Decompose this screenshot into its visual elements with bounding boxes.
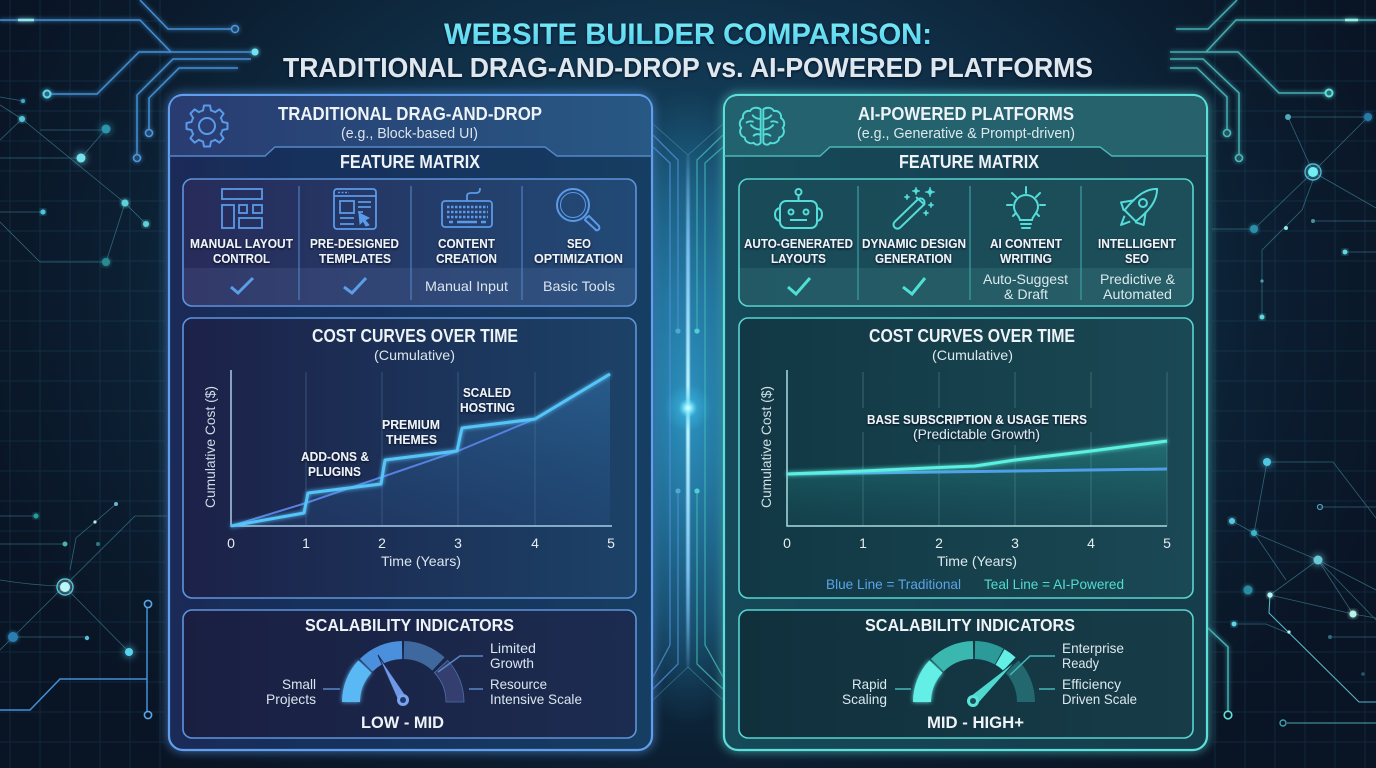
- label: enterprise ready: Enterprise: [1062, 640, 1124, 656]
- annotation: add-ons: [301, 449, 369, 479]
- straight trend line: [231, 419, 535, 526]
- panel subheading: (e.g., Block-based UI): [341, 126, 478, 142]
- panel heading: TRADITIONAL DRAG-AND-DROP: [278, 104, 542, 124]
- y axis label: Cumulative Cost ($): [202, 386, 218, 508]
- chart heading: COST CURVES OVER TIME: [869, 326, 1075, 346]
- axes: [787, 370, 1167, 526]
- feature matrix: [183, 179, 636, 306]
- feature: content creation: CREATION: [436, 251, 497, 266]
- value: predictive and automated: Automated: [1103, 286, 1172, 302]
- panel header band: [725, 96, 1206, 156]
- icon: gear: [186, 106, 228, 146]
- x axis label: Time (Years): [381, 553, 461, 569]
- annotation: base subscription: [867, 412, 1087, 442]
- label: small projects: Small: [282, 676, 316, 692]
- label: small projects: [266, 676, 316, 707]
- feature: intelligent seo: [1098, 236, 1176, 266]
- annotation: base subscription: BASE SUBSCRIPTION & USAGE TIERS: [867, 412, 1087, 427]
- label: limited growth: Limited: [490, 640, 536, 656]
- gauge needle: [969, 660, 1017, 705]
- scalability indicators: [183, 610, 636, 738]
- annotation: add-ons: PLUGINS: [308, 464, 361, 479]
- feature: pre-designed templates: [310, 236, 399, 266]
- ai teal line: [787, 441, 1167, 474]
- icon: keyboard: [442, 188, 492, 227]
- legend: [826, 576, 1124, 592]
- check 1: [788, 278, 810, 294]
- x tick labels: 3: [1011, 535, 1019, 551]
- panel subheading: (e.g., Generative & Prompt-driven): [857, 126, 1075, 142]
- feature matrix heading: FEATURE MATRIX: [340, 152, 480, 172]
- network nodes: right: [1208, 113, 1376, 726]
- value: basic tools: Basic Tools: [543, 278, 615, 294]
- label: resource intensive scale: Intensive Scale: [490, 691, 582, 707]
- feature: content creation: CONTENT: [438, 236, 495, 251]
- cost curve chart: [183, 318, 636, 598]
- cost curve chart: [739, 318, 1193, 598]
- scalability indicators: [739, 610, 1193, 738]
- check 2: [903, 278, 925, 294]
- feature: manual layout control: [190, 236, 293, 266]
- label: resource intensive scale: [490, 676, 582, 707]
- label: rapid scaling: Rapid: [852, 676, 887, 692]
- x tick labels: 5: [1163, 535, 1171, 551]
- x tick labels: 2: [378, 535, 386, 551]
- feature: auto-generated layouts: LAYOUTS: [771, 251, 826, 266]
- value: predictive and automated: Predictive &: [1100, 271, 1176, 287]
- chart subheading: (Cumulative): [374, 347, 455, 363]
- x tick labels: 1: [859, 535, 867, 551]
- icon: magic wand: [892, 187, 935, 230]
- feature: seo optimization: [534, 236, 623, 266]
- y axis label: Cumulative Cost ($): [758, 386, 774, 508]
- x tick labels: 4: [1087, 535, 1095, 551]
- icon: rocket: [1110, 178, 1168, 236]
- panel body: [169, 95, 652, 750]
- feature: dynamic design generation: DYNAMIC DESIGN: [862, 236, 966, 251]
- panel body: [724, 95, 1207, 750]
- label: limited growth: [490, 640, 536, 671]
- feature: seo optimization: SEO: [567, 236, 591, 251]
- icon: magnifier: [557, 189, 599, 230]
- stepped cost line: [231, 374, 610, 526]
- title: [283, 18, 1093, 83]
- annotation: base subscription: (Predictable Growth): [913, 426, 1040, 442]
- annotation: scaled hosting: [460, 385, 515, 415]
- x tick labels: 5: [607, 535, 615, 551]
- gauge value: MID - HIGH+: [927, 713, 1024, 732]
- feature matrix heading: FEATURE MATRIX: [899, 152, 1039, 172]
- feature: auto-generated layouts: [744, 236, 853, 266]
- x axis label: Time (Years): [937, 553, 1017, 569]
- title line 1: WEBSITE BUILDER COMPARISON:: [444, 18, 932, 51]
- label: resource intensive scale: Resource: [490, 676, 547, 692]
- gauge: [342, 641, 464, 706]
- value: auto-suggest and draft: Auto-Suggest: [983, 271, 1068, 287]
- feature: dynamic design generation: [862, 236, 966, 266]
- area under curve: [787, 441, 1167, 526]
- area under curve: [231, 374, 610, 526]
- label: small projects: Projects: [266, 691, 316, 707]
- annotation: scaled hosting: HOSTING: [460, 400, 515, 415]
- x tick labels: [783, 535, 1171, 551]
- check 1: [231, 278, 253, 293]
- x tick labels: 4: [531, 535, 539, 551]
- feature: pre-designed templates: TEMPLATES: [319, 251, 391, 266]
- label: enterprise ready: Ready: [1062, 655, 1099, 671]
- label: rapid scaling: [842, 676, 887, 707]
- x tick labels: 0: [783, 535, 791, 551]
- title line 2: TRADITIONAL DRAG-AND-DROP vs. AI-POWERED PLATFORMS: [283, 52, 1093, 83]
- circuit traces: top right: [1170, 0, 1376, 162]
- legend: Blue Line = Traditional: [826, 576, 961, 592]
- gauge: [913, 641, 1035, 707]
- panel header band: [170, 96, 651, 156]
- check 2: [344, 278, 366, 293]
- value: auto-suggest and draft: & Draft: [1004, 286, 1048, 302]
- label: efficiency driven scale: Efficiency: [1062, 676, 1121, 692]
- circuit traces: top left: [0, 0, 258, 162]
- chart heading: COST CURVES OVER TIME: [312, 326, 518, 346]
- x tick labels: 0: [227, 535, 235, 551]
- value: manual input: Manual Input: [425, 278, 508, 294]
- panel heading: AI-POWERED PLATFORMS: [858, 104, 1074, 124]
- feature: ai content writing: [990, 236, 1062, 266]
- value: predictive and automated: [1100, 271, 1176, 302]
- gauge value: LOW - MID: [361, 713, 444, 732]
- icon: layout: [222, 189, 262, 228]
- feature: ai content writing: WRITING: [1000, 251, 1052, 266]
- feature: dynamic design generation: GENERATION: [875, 251, 952, 266]
- feature: ai content writing: AI CONTENT: [990, 236, 1062, 251]
- label: rapid scaling: Scaling: [842, 691, 887, 707]
- feature: manual layout control: MANUAL LAYOUT: [190, 236, 293, 251]
- annotation: premium themes: PREMIUM: [382, 417, 440, 432]
- feature: seo optimization: OPTIMIZATION: [534, 251, 623, 266]
- annotation: premium themes: THEMES: [386, 432, 437, 447]
- feature matrix: [739, 178, 1193, 306]
- annotation: premium themes: [382, 417, 440, 447]
- scalability heading: SCALABILITY INDICATORS: [305, 615, 514, 635]
- icon: robot: [775, 189, 822, 228]
- label: efficiency driven scale: [1062, 676, 1137, 707]
- x tick labels: 1: [302, 535, 310, 551]
- legend: Teal Line = AI-Powered: [984, 576, 1124, 592]
- panel: traditional drag-and-drop: [169, 95, 652, 750]
- x tick labels: [227, 535, 615, 551]
- x tick labels: 2: [935, 535, 943, 551]
- value: auto-suggest and draft: [983, 271, 1068, 302]
- icon: brain: [740, 108, 784, 145]
- centre connector: [653, 124, 723, 700]
- label: enterprise ready: [1062, 640, 1124, 671]
- feature: auto-generated layouts: AUTO-GENERATED: [744, 236, 853, 251]
- x tick labels: 3: [454, 535, 462, 551]
- traditional blue line: [787, 469, 1167, 474]
- panel: ai-powered platforms: [724, 95, 1207, 750]
- icon: light bulb: [1007, 187, 1045, 228]
- label: efficiency driven scale: Driven Scale: [1062, 691, 1137, 707]
- chart subheading: (Cumulative): [932, 347, 1013, 363]
- feature: content creation: [436, 236, 497, 266]
- annotation: scaled hosting: SCALED: [463, 385, 511, 400]
- gauge leader lines: [323, 656, 483, 689]
- scalability heading: SCALABILITY INDICATORS: [865, 615, 1075, 635]
- annotation: add-ons: ADD-ONS &: [301, 449, 369, 464]
- feature: pre-designed templates: PRE-DESIGNED: [310, 236, 399, 251]
- icon: template: [334, 189, 376, 229]
- label: limited growth: Growth: [490, 655, 534, 671]
- feature: manual layout control: CONTROL: [213, 251, 270, 266]
- gauge needle: [378, 655, 408, 703]
- axes: [231, 370, 612, 526]
- network nodes: left: [0, 97, 167, 719]
- feature: intelligent seo: SEO: [1125, 251, 1149, 266]
- feature: intelligent seo: INTELLIGENT: [1098, 236, 1176, 251]
- gauge leader lines: [895, 656, 1055, 689]
